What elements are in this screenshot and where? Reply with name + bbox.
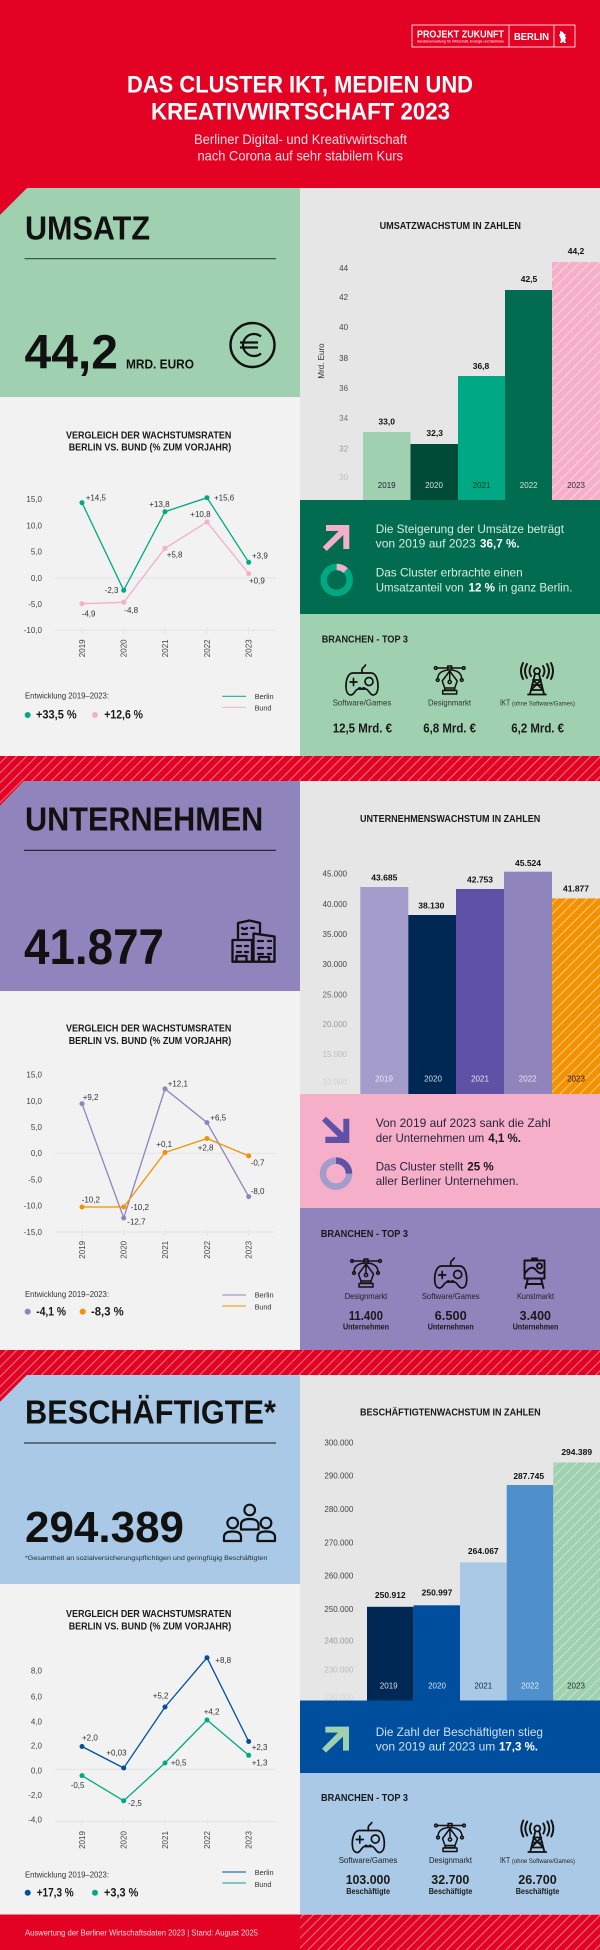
legend [222, 692, 274, 712]
item: Kunstmarkt: Unternehmen [513, 1322, 558, 1331]
development figures: +33,5 % [36, 710, 77, 722]
icon: arrow down [322, 1117, 349, 1143]
item: IKT: (ohne Software/Games) [512, 701, 575, 707]
icon: donut 25 % [323, 1161, 349, 1187]
item: Software/Games: 12,5 Mrd. € [333, 720, 392, 735]
legend: Bund [255, 1880, 271, 1889]
y axis: 15.000 [323, 1050, 348, 1059]
item: Designmarkt: 6,8 Mrd. € [423, 720, 476, 735]
line chart: Beschäftigte rates: +2,0 [82, 1734, 98, 1743]
line chart: Umsatz rates: 2020 [120, 639, 129, 657]
y axis: Mrd. Euro [317, 343, 326, 379]
line chart: Umsatz rates: -4,9 [82, 609, 96, 618]
chart title: VERGLEICH DER WACHSTUMSRATEN [66, 1609, 231, 1620]
line chart: Beschäftigte rates: 0,0 [31, 1766, 43, 1775]
fact text: 36,7 %. [480, 537, 520, 551]
bars: 2019 [378, 481, 396, 490]
bars: 2022 [520, 481, 538, 490]
heading: Unternehmen: UNTERNEHMEN [25, 801, 263, 838]
development figures [25, 1870, 138, 1900]
panel: Unternehmen bar chart [300, 781, 600, 1094]
line chart: Unternehmen rates: -0,7 [251, 1158, 265, 1168]
bars: 42,5 [521, 274, 538, 284]
line chart: Umsatz rates: -10,0 [24, 626, 43, 635]
y axis: 34 [339, 414, 349, 423]
y axis: 36 [339, 384, 349, 393]
line chart: Unternehmen rates: +2,8 [198, 1143, 214, 1152]
development figures: Entwicklung 2019–2023: [25, 692, 109, 701]
title: DAS CLUSTER IKT, MEDIEN UND [127, 72, 473, 99]
stripe band 1 [0, 756, 600, 806]
bars: 2021 [471, 1074, 489, 1084]
subtitle: nach Corona auf sehr stabilem Kurs [198, 148, 403, 164]
title: KREATIVWIRTSCHAFT 2023 [151, 98, 450, 126]
chart title [66, 1609, 231, 1632]
y axis: 240.000 [324, 1637, 354, 1646]
bars: 38.130 [418, 900, 445, 910]
fact text: 12 % [468, 581, 495, 595]
line chart: Unternehmen rates: 15,0 [26, 1071, 43, 1080]
line chart: Unternehmen rates: 2019 [78, 1240, 87, 1259]
line chart: Beschäftigte rates: +8,8 [215, 1656, 232, 1665]
fact text: in ganz Berlin. [498, 581, 572, 595]
fact text: Das Cluster erbrachte einen [376, 566, 523, 580]
item: Software/Games: Software/Games [339, 1855, 397, 1865]
line chart: Beschäftigte rates: -2,5 [128, 1799, 142, 1808]
development figures: Entwicklung 2019–2023: [25, 1290, 109, 1299]
fact text: 17,3 %. [499, 1740, 538, 1754]
key figure: 41.877: 41.877 [24, 919, 164, 975]
y axis: 270.000 [324, 1538, 354, 1547]
panel: Umsatz top 3 [300, 614, 600, 756]
item: IKT: 26.700 [518, 1873, 557, 1887]
line chart: Beschäftigte rates: 2022 [203, 1831, 212, 1849]
y axis: 32 [339, 445, 349, 454]
logo: Projekt Zukunft Berlin: Senatsverwaltung für Wirtschaft, Energie und Betriebe [417, 40, 504, 44]
item: IKT: IKT [500, 1855, 510, 1865]
line chart: Beschäftigte rates: +0,03 [106, 1748, 127, 1757]
bars: 2023 [567, 1074, 585, 1084]
chart title [66, 1024, 231, 1047]
item: Designmarkt: Beschäftigte [429, 1887, 473, 1896]
line chart: Unternehmen rates: 2023 [245, 1240, 254, 1259]
development figures [25, 1290, 124, 1319]
y axis: 40.000 [323, 900, 348, 909]
item: Software/Games: Beschäftigte [346, 1887, 390, 1896]
line chart: Umsatz rates: +15,6 [214, 493, 235, 502]
line chart: Beschäftigte rates: 4,0 [31, 1717, 43, 1726]
line chart: Unternehmen rates: -12,7 [127, 1218, 146, 1227]
bars: 264.067 [468, 1546, 499, 1556]
icon: donut 12 % [324, 567, 350, 593]
y axis [323, 869, 348, 1086]
fact text [376, 1116, 551, 1188]
item: Software/Games: Unternehmen [428, 1322, 474, 1331]
bars: 41.877 [563, 883, 589, 893]
item: Designmarkt: Unternehmen [343, 1322, 389, 1331]
y axis: 25.000 [323, 990, 348, 999]
heading: BRANCHEN - TOP 3 [321, 1228, 408, 1240]
item: Kunstmarkt: Kunstmarkt [517, 1291, 555, 1301]
y axis: 42 [339, 293, 349, 302]
line chart: Umsatz rates: 2022 [203, 639, 212, 657]
y axis: 45.000 [323, 869, 348, 878]
item: Designmarkt: 32.700 [431, 1873, 469, 1887]
line chart: Unternehmen rates: +12,1 [168, 1080, 188, 1089]
line chart: Beschäftigte rates: +4,2 [204, 1708, 220, 1717]
panel: Beschäftigte top 3 [300, 1773, 600, 1914]
bars: 250.912 [375, 1590, 406, 1600]
heading: BRANCHEN - TOP 3 [322, 634, 408, 646]
y axis: 10.000 [323, 1077, 348, 1086]
logo: Projekt Zukunft Berlin: BERLIN [514, 31, 549, 43]
line chart: Unternehmen rates: 2022 [203, 1240, 212, 1259]
line chart: Umsatz rates: +5,8 [167, 551, 183, 560]
bars: 2023 [567, 481, 585, 490]
panel: Beschäftigte facts [300, 1700, 600, 1773]
line chart: Umsatz rates: 15,0 [26, 495, 43, 504]
item: IKT [500, 663, 575, 735]
icon: arrow up [322, 1727, 349, 1753]
line chart: Unternehmen rates: +9,2 [83, 1093, 99, 1102]
line chart: Umsatz rates: -2,3 [105, 586, 119, 595]
y axis: 38 [339, 354, 349, 363]
panel: Umsatz facts [300, 500, 600, 614]
line chart: Umsatz rates: 5,0 [31, 548, 43, 556]
key figure: 294.389: 294.389 [25, 1503, 184, 1552]
bars: 2020 [424, 1074, 442, 1084]
line chart: Beschäftigte rates: 6,0 [31, 1692, 43, 1702]
item: Designmarkt [429, 1824, 473, 1896]
icon: buildings [232, 920, 274, 962]
fact text: von 2019 auf 2023 um [376, 1740, 495, 1754]
fact text [376, 522, 572, 595]
line chart: Umsatz rates: 2021 [161, 639, 170, 657]
y axis: 20.000 [323, 1020, 348, 1029]
fact text: Die Steigerung der Umsätze beträgt [376, 522, 565, 536]
heading: Umsatz: UMSATZ [25, 210, 150, 246]
line chart: Beschäftigte rates: +5,2 [153, 1691, 169, 1700]
line chart: Beschäftigte rates: 8,0 [31, 1666, 43, 1676]
heading: Beschäftigte: BESCHÄFTIGTE* [25, 1394, 276, 1430]
key figure: 44,2 Mrd. Euro: 44,2 [24, 326, 118, 380]
legend [222, 1868, 274, 1889]
bars: 2021 [474, 1681, 493, 1690]
footer: Auswertung der Berliner Wirtschaftsdaten 2023 | Stand: August 2025 [25, 1928, 258, 1938]
line chart: Beschäftigte rates: 2,0 [31, 1742, 43, 1750]
line chart: Unternehmen rates [24, 1071, 276, 1259]
development figures: -4,1 % [36, 1307, 66, 1319]
line chart: Unternehmen rates: -8,0 [251, 1187, 265, 1196]
subtitle [194, 131, 407, 164]
y axis: 230.000 [324, 1693, 354, 1702]
line chart: Unternehmen rates: +6,5 [210, 1113, 227, 1122]
line chart: Umsatz rates: 0,0 [31, 574, 43, 583]
item: Kunstmarkt [513, 1258, 558, 1331]
bars: 2019 [375, 1074, 393, 1084]
title [127, 72, 473, 126]
line chart: Unternehmen rates: +0,1 [156, 1140, 173, 1149]
header band [0, 0, 600, 216]
panel: Unternehmen facts [300, 1094, 600, 1208]
development figures: -8,3 % [91, 1307, 124, 1319]
legend: Berlin [255, 1868, 274, 1877]
panel: Beschäftigte key figure [0, 1375, 300, 1584]
line chart: Unternehmen rates: -10,2 [131, 1203, 149, 1212]
panel: Umsatz bar chart [300, 188, 600, 500]
line chart: Unternehmen rates: 5,0 [31, 1123, 43, 1132]
bars: 42.753 [467, 874, 493, 884]
line chart: Beschäftigte rates: -0,5 [71, 1781, 85, 1790]
panel: Umsatz growth comparison [0, 397, 300, 756]
y axis: 250.000 [324, 1605, 354, 1614]
icon: people [224, 1505, 275, 1541]
line chart: Unternehmen rates: -5,0 [28, 1175, 43, 1184]
bars: 294.389 [561, 1447, 592, 1457]
fact text: der Unternehmen um [376, 1131, 484, 1145]
panel: Beschäftigte growth comparison [0, 1584, 300, 1915]
line chart: Umsatz rates: +0,9 [249, 577, 265, 586]
fact text: aller Berliner Unternehmen. [376, 1174, 519, 1188]
item: Designmarkt [343, 1259, 389, 1331]
item: Designmarkt: Designmarkt [345, 1291, 388, 1301]
stripe band 2 [0, 1350, 600, 1402]
line chart: Beschäftigte rates: -4,0 [28, 1815, 43, 1824]
panel: Unternehmen growth comparison [0, 991, 300, 1350]
y axis: 300.000 [324, 1438, 354, 1447]
item: Software/Games [422, 1258, 480, 1331]
item: Software/Games: Software/Games [422, 1291, 480, 1301]
line chart: Unternehmen rates: 10,0 [26, 1097, 43, 1106]
line chart: Umsatz rates [24, 493, 276, 657]
line chart: Unternehmen rates: -15,0 [24, 1228, 43, 1237]
bars [363, 246, 600, 500]
bars: 2020 [425, 481, 443, 490]
bars: 2020 [428, 1681, 446, 1690]
fact text: von 2019 auf 2023 [376, 537, 476, 551]
line chart: Beschäftigte rates: 2023 [245, 1831, 254, 1849]
bars: 32,3 [426, 428, 443, 438]
bars: 36,8 [473, 361, 490, 371]
footer [0, 1914, 600, 1950]
line chart: Umsatz rates: 2019 [78, 639, 87, 657]
legend: Bund [255, 1302, 271, 1311]
panel: Unternehmen key figure [0, 781, 300, 991]
bars [367, 1447, 600, 1700]
chart title [66, 430, 231, 454]
icon: euro [230, 323, 274, 367]
item: Designmarkt: Designmarkt [428, 697, 472, 707]
line chart: Umsatz rates: -5,0 [28, 600, 43, 609]
fact text: 4,1 %. [488, 1131, 521, 1145]
logo: Projekt Zukunft Berlin [412, 25, 575, 47]
bars: 2021 [473, 481, 491, 490]
y axis [324, 1438, 354, 1702]
line chart: Umsatz rates: 2023 [245, 639, 254, 657]
panel: Umsatz key figure: MRD. EURO [126, 358, 194, 372]
y axis: 230.000 [324, 1665, 354, 1674]
line chart: Umsatz rates: 10,0 [26, 522, 43, 530]
panel: Unternehmen top 3 [300, 1208, 600, 1350]
item: Kunstmarkt: 3.400 [520, 1309, 551, 1323]
bars [360, 858, 600, 1094]
panel: Umsatz key figure [0, 188, 300, 397]
fact text: Umsatzanteil von [376, 581, 464, 595]
line chart: Beschäftigte rates: -2,0 [28, 1791, 43, 1800]
item: Software/Games: 6.500 [435, 1309, 467, 1323]
line chart: Umsatz rates: +10,8 [190, 510, 211, 519]
line chart: Beschäftigte rates [28, 1655, 276, 1849]
y axis: 44 [339, 264, 349, 273]
y axis: 290.000 [324, 1471, 354, 1480]
line chart: Umsatz rates: +14,5 [86, 493, 106, 502]
item: Software/Games: 103.000 [346, 1873, 390, 1887]
subtitle: Berliner Digital- und Kreativwirtschaft [194, 131, 407, 147]
item: IKT: 6,2 Mrd. € [511, 720, 564, 735]
footnote: *Gesamtheit an sozialversicherungspflichtigen und geringfügig Beschäftigten [25, 1555, 268, 1562]
item: Designmarkt [423, 666, 476, 735]
line chart: Unternehmen rates: -10,0 [24, 1202, 43, 1211]
item: Software/Games [339, 1822, 397, 1896]
y axis [317, 264, 349, 482]
fact text: Das Cluster stellt [376, 1159, 464, 1173]
chart title: BERLIN VS. BUND (% ZUM VORJAHR) [69, 443, 231, 454]
item: Designmarkt: 11.400 [349, 1309, 383, 1323]
fact text: Die Zahl der Beschäftigten stieg [376, 1725, 543, 1739]
y axis: 35.000 [323, 930, 348, 939]
item: IKT [500, 1820, 575, 1896]
icon: arrow up [323, 525, 349, 551]
line chart: Beschäftigte rates: +2,3 [252, 1743, 268, 1752]
item: IKT: (ohne Software/Games) [512, 1859, 575, 1865]
bars: 44,2 [568, 246, 585, 256]
development figures: +17,3 % [37, 1888, 74, 1900]
chart title: BERLIN VS. BUND (% ZUM VORJAHR) [69, 1036, 231, 1047]
legend: Bund [255, 703, 271, 712]
development figures: Entwicklung 2019–2023: [25, 1870, 109, 1879]
bars: 33,0 [378, 417, 395, 427]
panel: Beschäftigte bar chart [300, 1375, 600, 1702]
line chart: Unternehmen rates: 2021 [161, 1240, 170, 1259]
y axis: 260.000 [324, 1572, 354, 1581]
line chart: Beschäftigte rates: +0,5 [171, 1759, 187, 1768]
bars: 2023 [567, 1681, 585, 1690]
legend [222, 1291, 274, 1311]
item: Software/Games [333, 665, 392, 735]
item: IKT: IKT [500, 697, 510, 707]
fact text: 25 % [467, 1159, 494, 1173]
y axis: 30 [339, 473, 349, 482]
bars: 2019 [380, 1681, 398, 1690]
legend: Berlin [255, 1291, 274, 1300]
development figures: +3,3 % [104, 1888, 138, 1900]
bars: 2022 [519, 1074, 537, 1084]
line chart: Umsatz rates: +3,9 [252, 552, 268, 561]
heading: BRANCHEN - TOP 3 [321, 1792, 408, 1804]
chart title: VERGLEICH DER WACHSTUMSRATEN [66, 430, 231, 441]
item: IKT: Beschäftigte [516, 1887, 560, 1896]
bars: 43.685 [371, 873, 398, 883]
line chart: Unternehmen rates: 0,0 [31, 1149, 43, 1158]
y axis: 30.000 [323, 960, 348, 969]
line chart: Unternehmen rates: 2020 [120, 1240, 129, 1259]
line chart: Beschäftigte rates: 2020 [120, 1831, 129, 1849]
bars: 45.524 [515, 858, 541, 868]
fact text [376, 1725, 543, 1754]
line chart: Beschäftigte rates: 2021 [161, 1831, 170, 1849]
item: Designmarkt: Designmarkt [429, 1855, 473, 1865]
fact text: Von 2019 auf 2023 sank die Zahl [376, 1116, 551, 1130]
line chart: Unternehmen rates: -10,2 [82, 1196, 100, 1204]
development figures: +12,6 % [104, 710, 143, 722]
chart title: UMSATZWACHSTUM IN ZAHLEN [380, 221, 521, 232]
chart title: VERGLEICH DER WACHSTUMSRATEN [66, 1024, 231, 1035]
bars: 250.997 [422, 1588, 453, 1598]
legend: Berlin [255, 692, 274, 701]
chart title: UNTERNEHMENSWACHSTUM IN ZAHLEN [360, 814, 540, 825]
item: Software/Games: Software/Games [333, 697, 391, 707]
bars: 287.745 [513, 1471, 544, 1481]
chart title: BERLIN VS. BUND (% ZUM VORJAHR) [69, 1621, 231, 1632]
chart title: BESCHÄFTIGTENWACHSTUM IN ZAHLEN [360, 1405, 541, 1418]
line chart: Umsatz rates: -4,8 [124, 606, 139, 615]
line chart: Beschäftigte rates: +1,3 [252, 1759, 268, 1768]
y axis: 40 [339, 323, 349, 332]
line chart: Umsatz rates: +13,8 [149, 500, 170, 509]
bars: 2022 [521, 1681, 539, 1690]
development figures [25, 692, 143, 722]
logo: Projekt Zukunft Berlin: PROJEKT ZUKUNFT [417, 28, 504, 40]
y axis: 280.000 [324, 1505, 354, 1514]
line chart: Beschäftigte rates: 2019 [78, 1831, 87, 1849]
